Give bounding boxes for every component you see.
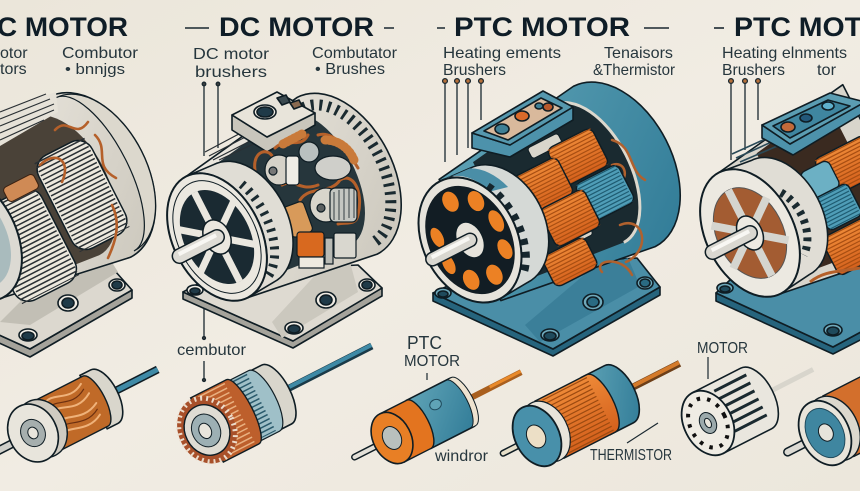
striped windings	[0, 92, 132, 307]
rotor 6: cropped wound rotor	[772, 371, 860, 482]
front end bell	[0, 156, 42, 318]
labels: second PTC motor: Heating elnments	[722, 45, 847, 62]
rotor 1: copper wound	[0, 343, 171, 479]
labels: DC motor: DC motor	[193, 46, 270, 63]
internal parts	[255, 134, 360, 268]
heading: PTC motor: PTC MOTOR	[454, 12, 630, 42]
housing	[429, 60, 707, 320]
base plate	[0, 256, 132, 357]
labels: PTC motor: Tenaisors	[604, 45, 673, 62]
label: motor: MOTOR	[697, 340, 748, 357]
coils	[511, 127, 645, 288]
label: PTC motor: MOTOR	[404, 353, 460, 370]
labels: first motor: tors	[0, 61, 27, 78]
front end bell	[440, 145, 569, 299]
base plate	[433, 258, 660, 356]
motor 3: teal PTC motor	[398, 60, 707, 356]
housing with rear vents	[177, 72, 427, 315]
labels: second PTC motor: tor	[817, 62, 837, 79]
heading: DC motor: DC MOTOR	[219, 12, 374, 42]
terminal box	[232, 92, 315, 152]
callout lines: PTC motor	[443, 79, 483, 162]
label: thermistor: THERMISTOR	[590, 447, 672, 464]
labels: DC motor: Combutator	[312, 45, 398, 62]
labels: first motor	[0, 45, 139, 78]
top fins	[205, 127, 260, 160]
labels: DC motor: brushers	[195, 64, 267, 81]
coils	[799, 135, 860, 282]
callout lines: DC motor	[202, 82, 220, 381]
labels: DC motor: • Brushes	[315, 61, 385, 78]
rotor 5: vented silver motor	[671, 339, 829, 464]
rotor 3: orange and teal PTC rotor	[342, 348, 533, 481]
labels: first motor: otor	[0, 45, 28, 62]
label: cembutor: cembutor	[177, 342, 247, 359]
motor 4: second PTC motor	[680, 85, 860, 354]
heading: PTC motor cropped: PTC MOT	[734, 12, 860, 42]
label: windror: windror	[434, 448, 489, 465]
front face with orange poles and shaft	[398, 160, 542, 320]
labels: PTC motor: Brushers	[443, 62, 506, 79]
label: motor	[697, 340, 748, 379]
labels: first motor: Combutor	[62, 45, 139, 62]
housing	[709, 85, 860, 313]
labels: PTC motor: Heating ements	[443, 45, 561, 62]
labels: first motor: • bnnjgs	[65, 61, 125, 78]
motor 1: silver DC motor	[0, 71, 182, 357]
base plate	[716, 262, 860, 354]
label: thermistor	[590, 423, 672, 464]
rotor 4: thermistor rotor	[489, 335, 694, 482]
callout lines: second PTC motor	[729, 79, 760, 160]
label: PTC motor	[404, 333, 460, 380]
motor 2: DC motor	[147, 72, 427, 348]
labels: second PTC motor	[722, 45, 847, 79]
base plate	[183, 262, 382, 348]
terminal box	[762, 93, 860, 155]
labels: PTC motor: &Thermistor	[593, 62, 676, 79]
front face with spokes and shaft	[147, 156, 287, 318]
terminal box	[472, 91, 573, 157]
front face with copper windings and shaft	[680, 152, 820, 314]
front end bell	[186, 143, 314, 298]
labels: second PTC motor: Brushers	[722, 62, 785, 79]
heading: DC motor cropped: C MOTOR	[0, 12, 128, 42]
labels: PTC motor	[443, 45, 676, 79]
rotor 2: commutator armature	[166, 314, 388, 475]
housing	[0, 71, 182, 317]
label: PTC motor: PTC	[407, 333, 442, 353]
top fins	[732, 136, 782, 162]
labels: DC motor	[193, 45, 398, 81]
front end bell	[719, 138, 849, 294]
